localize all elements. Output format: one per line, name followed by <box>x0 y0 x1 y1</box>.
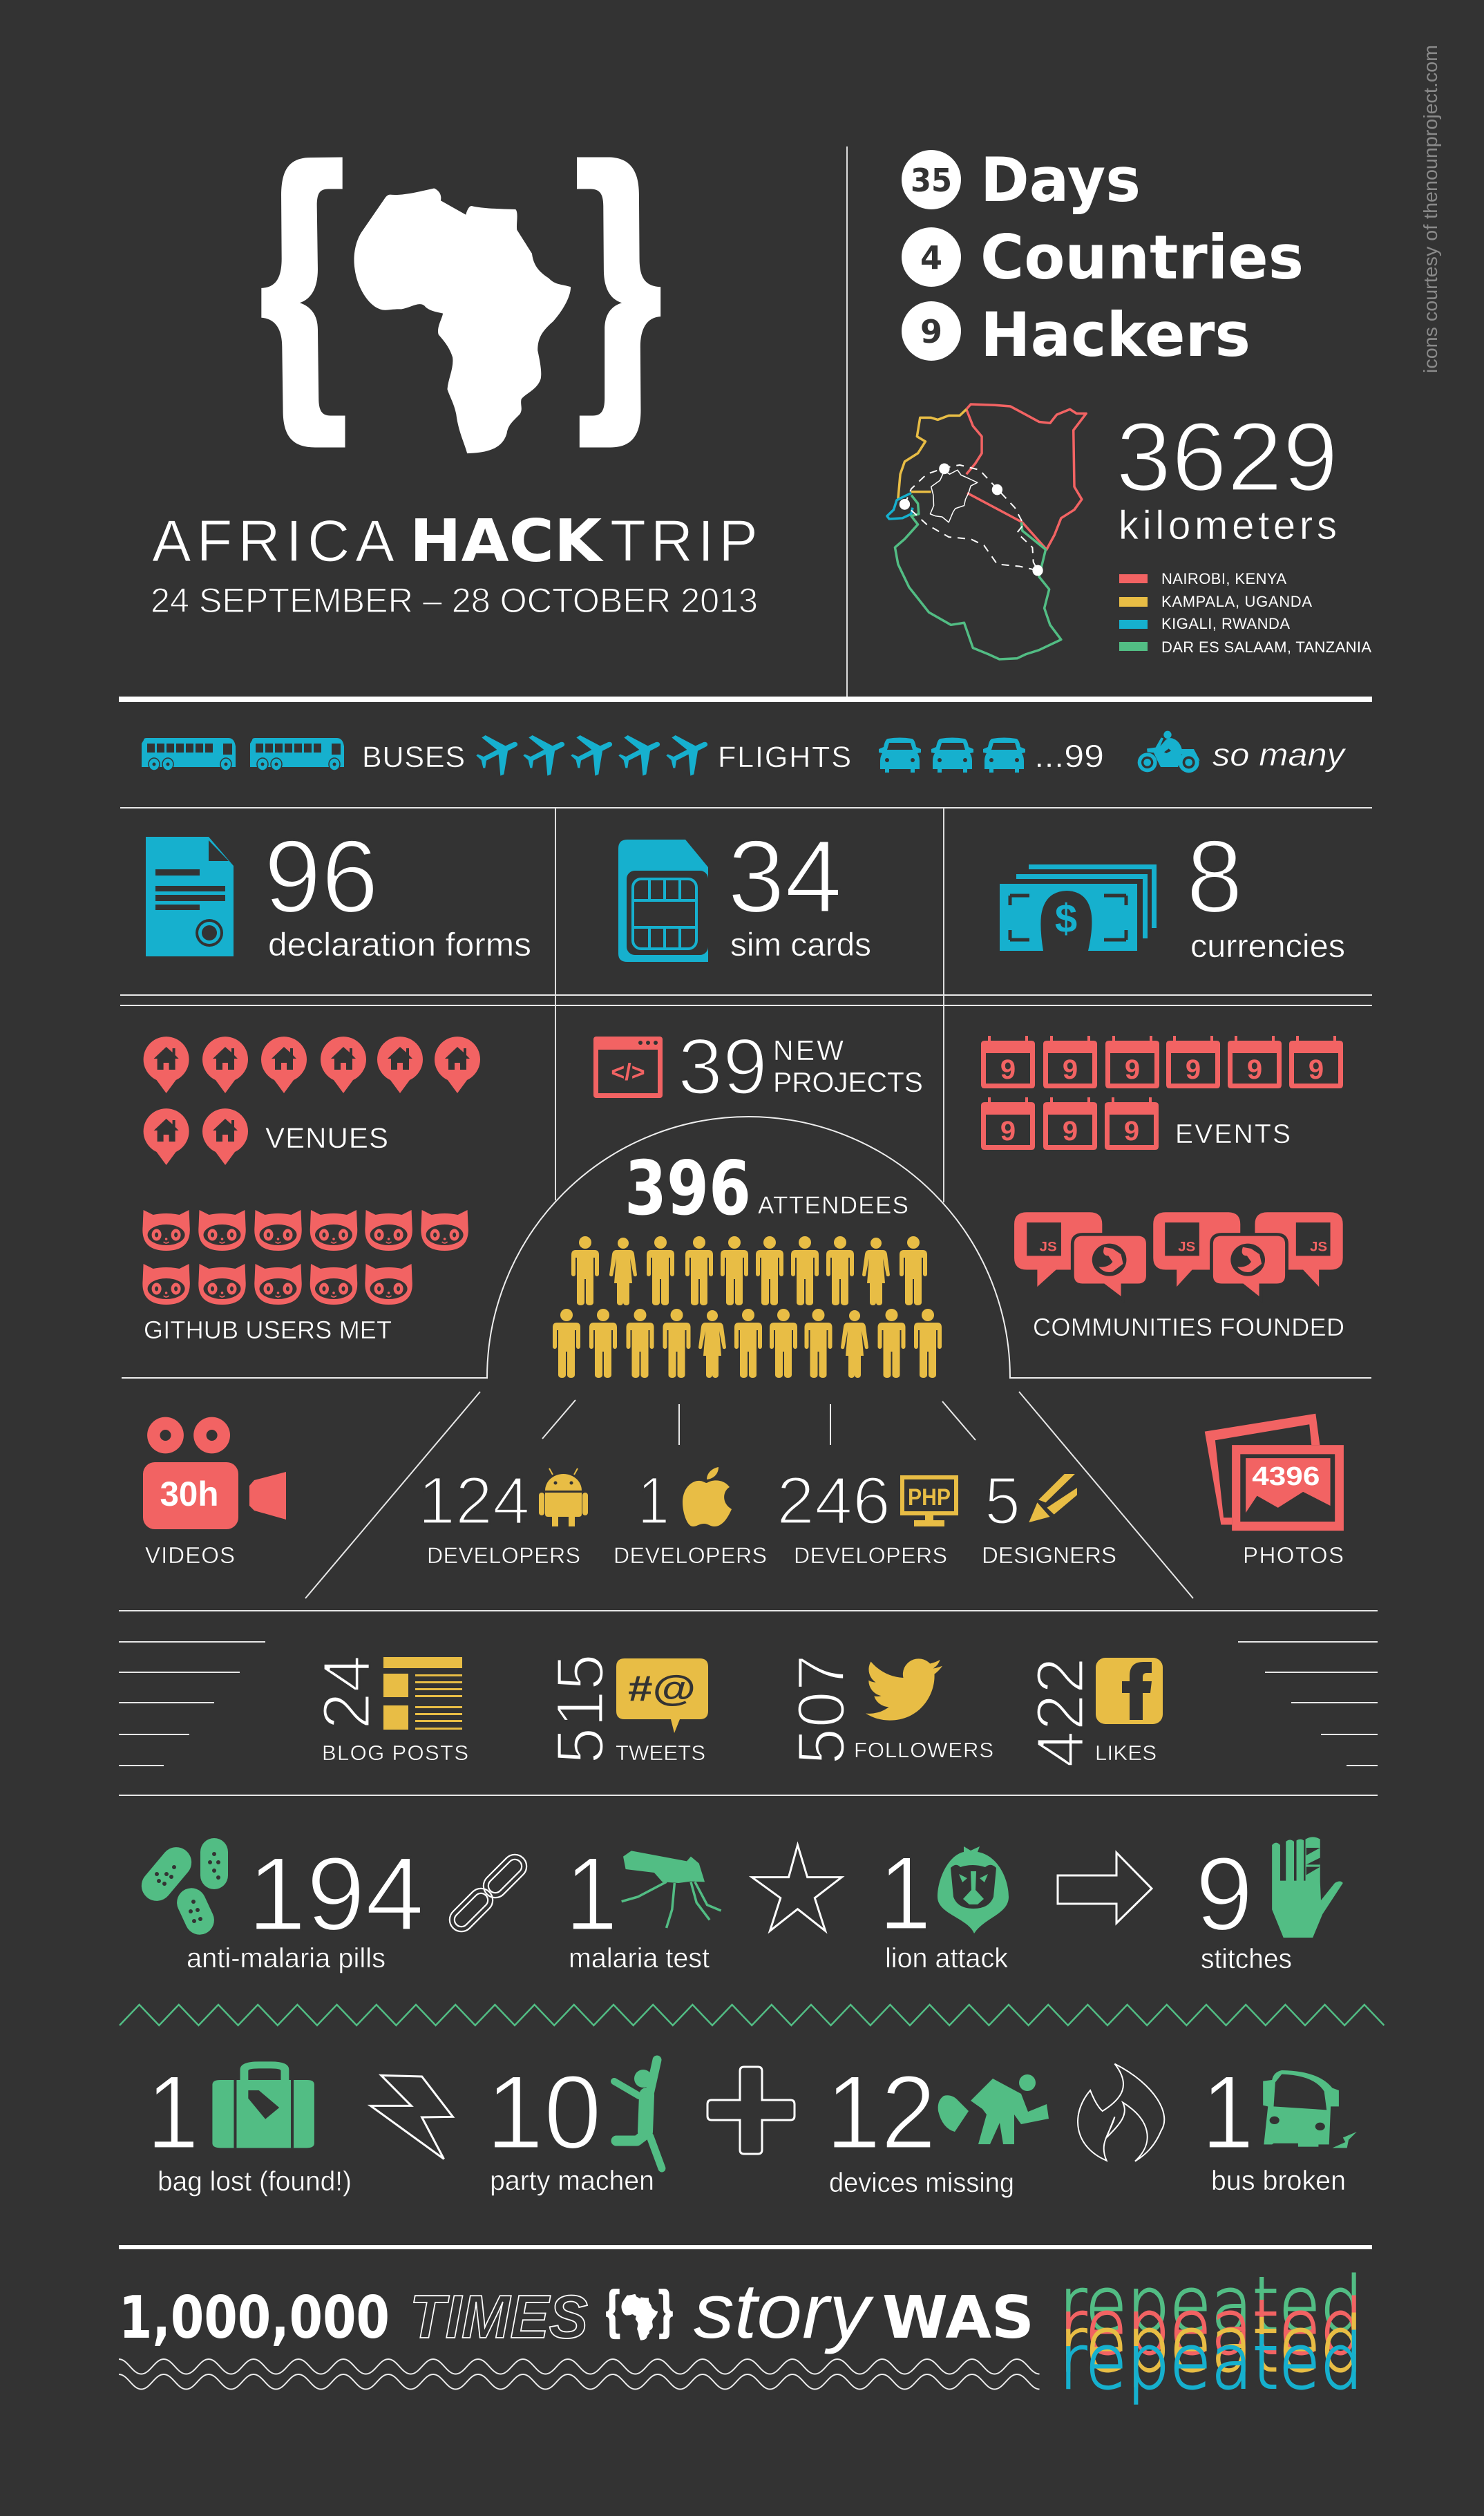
panel: trip totals <box>902 144 1304 370</box>
label: designers: DESIGNERS <box>982 1542 1116 1568</box>
label: malaria test: malaria test <box>569 1943 710 1974</box>
icon: video camera: 30h <box>160 1475 218 1513</box>
icon: php monitor: PHP <box>908 1484 951 1511</box>
label: devices missing: devices missing <box>829 2168 1014 2198</box>
label: videos: VIDEOS <box>145 1542 235 1568</box>
label: developers: DEVELOPERS <box>613 1543 767 1568</box>
icon: banknotes: $ <box>1055 896 1077 941</box>
label: bag lost: bag lost (found!) <box>158 2166 352 2197</box>
stat: 3629 kilometers: kilometers <box>1119 503 1337 548</box>
panel: blog posts <box>309 1655 468 1765</box>
label: currencies: currencies <box>1190 927 1345 964</box>
icon: suitcase <box>212 2061 314 2148</box>
stat: 9 hackers: 9 <box>920 313 942 350</box>
panel: sim cards <box>618 818 871 963</box>
label: github users met: GITHUB USERS MET <box>144 1316 392 1344</box>
icon: facebook <box>1096 1658 1163 1724</box>
icon: star outline <box>752 1845 841 1931</box>
panel: photos <box>1205 1414 1344 1568</box>
number: 422: 422 <box>1022 1657 1098 1768</box>
panel: party machen <box>486 2054 662 2196</box>
icon: photo frames <box>1205 1414 1344 1531</box>
map: East Africa route <box>887 404 1086 659</box>
text: repeated layered: repeated <box>1059 2300 1363 2389</box>
icon: running man with bag <box>938 2074 1049 2144</box>
label: venues: VENUES <box>265 1122 388 1154</box>
panel: designers <box>982 1463 1116 1568</box>
icon: video camera <box>143 1417 286 1529</box>
icon: lightning outline <box>370 2075 453 2159</box>
title: AFRICA HACK TRIP <box>152 507 758 576</box>
text: story: story <box>694 2268 874 2354</box>
number: 10: 10 <box>486 2054 602 2171</box>
panel: anti-malaria pills <box>135 1835 424 1974</box>
icon: dancer <box>614 2060 662 2168</box>
panel: communities founded <box>1014 1212 1344 1341</box>
number: 1: 1 <box>1201 2054 1254 2171</box>
icon: blog layout <box>383 1657 462 1730</box>
number: 8: 8 <box>1186 818 1243 934</box>
date line: 24 SEPTEMBER – 28 OCTOBER 2013 <box>151 581 758 620</box>
text: TIMES outline: TIMES <box>410 2282 588 2351</box>
number: 1: 1 <box>638 1463 669 1538</box>
number: 39: 39 <box>678 1023 768 1111</box>
icon: plus outline <box>707 2067 795 2154</box>
panel: venues <box>144 1037 480 1165</box>
panel: devices missing <box>826 2054 1049 2198</box>
number: 1: 1 <box>565 1835 618 1953</box>
decoration: waves <box>119 2359 1039 2390</box>
stat: 35 days <box>902 144 1141 216</box>
label: tweets: TWEETS <box>616 1741 705 1765</box>
legend: cities <box>1119 570 1371 656</box>
label: 99 cars: ...99 <box>1034 738 1104 774</box>
panel: android developers <box>418 1463 588 1568</box>
label: buses: BUSES <box>362 741 465 774</box>
icon: banknotes <box>1000 864 1157 951</box>
panel: attendees <box>553 1146 942 1378</box>
icon: buses <box>142 738 344 770</box>
number: 1: 1 <box>146 2054 199 2171</box>
icon: small logo <box>606 2289 673 2340</box>
legend: cities: NAIROBI, KENYA <box>1161 570 1286 587</box>
panel: tweets <box>542 1654 708 1765</box>
panel: bus broken <box>1201 2054 1357 2196</box>
panel: videos <box>143 1417 286 1568</box>
icon: people row one <box>571 1236 927 1305</box>
icon: code window: </> <box>611 1059 645 1086</box>
icon: pencil <box>1029 1474 1077 1522</box>
text: WAS: WAS <box>882 2284 1034 2352</box>
icon: broken bus <box>1263 2070 1357 2148</box>
icon: arrow outline <box>1058 1853 1152 1923</box>
icon: code window <box>593 1037 663 1098</box>
label: declaration forms: declaration forms <box>268 926 531 963</box>
number: 1: 1 <box>879 1835 931 1952</box>
label: lion attack: lion attack <box>885 1943 1009 1974</box>
label: events: EVENTS <box>1175 1119 1291 1149</box>
icon: flame outline <box>1078 2064 1164 2162</box>
label: communities founded: COMMUNITIES FOUNDED <box>1033 1313 1344 1341</box>
icon: php monitor <box>902 1477 956 1526</box>
label: blog posts: BLOG POSTS <box>322 1741 468 1765</box>
icon: photo frames: 4396 <box>1252 1462 1320 1491</box>
label: flights: FLIGHTS <box>718 741 851 774</box>
panel: new projects <box>593 1023 923 1111</box>
icon: hash-at bubble: #@ <box>628 1669 696 1709</box>
icon: hash-at bubble <box>616 1658 708 1733</box>
icon: calendars <box>981 1036 1343 1150</box>
arc: attendees dome <box>122 1117 1371 1378</box>
panel: closing sentence <box>119 2260 1363 2406</box>
title: AFRICA HACK TRIP: TRIP <box>610 509 758 574</box>
icon: mosquito <box>622 1851 721 1928</box>
label: so many: so many <box>1212 737 1347 773</box>
panel: malaria test <box>565 1835 721 1974</box>
text: repeated layered: repeated <box>1059 2318 1363 2406</box>
number: 507: 507 <box>783 1654 859 1765</box>
icon: speech bubbles <box>1014 1212 1343 1296</box>
icon: calendars: 9 <box>1125 1054 1140 1085</box>
number: 5: 5 <box>984 1463 1020 1538</box>
label: stitches: stitches <box>1201 1944 1292 1974</box>
icon: document <box>146 837 234 956</box>
icon: calendars: 9 <box>1063 1054 1078 1085</box>
panel: likes <box>1022 1657 1163 1768</box>
label: attendees: ATTENDEES <box>758 1192 909 1219</box>
icon: motorbike <box>1138 731 1200 773</box>
icon: calendars: 9 <box>1309 1054 1324 1085</box>
number: 24: 24 <box>309 1655 384 1730</box>
icon: octocats <box>142 1210 468 1305</box>
label: photos: PHOTOS <box>1243 1542 1344 1568</box>
icon: cars <box>879 738 1025 773</box>
stat: 9 hackers: Hackers <box>980 299 1250 370</box>
text: 1,000,000: 1,000,000 <box>119 2284 390 2352</box>
stat: 3629 kilometers: 3629 <box>1116 402 1338 512</box>
icon: calendars: 9 <box>1247 1054 1262 1085</box>
label: bus broken: bus broken <box>1211 2166 1346 2196</box>
icon: stitched hand <box>1272 1837 1343 1938</box>
icon: people row two <box>553 1309 942 1378</box>
icon: speech bubbles: JS <box>1178 1240 1195 1254</box>
number: 34: 34 <box>727 818 842 934</box>
icon: calendars: 9 <box>1186 1054 1201 1085</box>
panel: declaration forms <box>146 818 531 963</box>
icon: calendars: 9 <box>1000 1054 1016 1085</box>
panel: github users <box>142 1210 468 1344</box>
panel: bag lost <box>146 2054 352 2197</box>
label: sim cards: sim cards <box>730 926 871 963</box>
panel: stitches <box>1195 1835 1343 1974</box>
legend: cities: KAMPALA, UGANDA <box>1161 593 1312 610</box>
label: anti-malaria pills: anti-malaria pills <box>187 1943 386 1974</box>
icon: flights <box>476 735 707 776</box>
title: AFRICA HACK TRIP: AFRICA <box>152 509 394 574</box>
number: 9: 9 <box>1195 1835 1253 1953</box>
number: 246: 246 <box>777 1463 891 1538</box>
label: likes: LIKES <box>1095 1741 1157 1765</box>
panel: php developers <box>777 1463 956 1568</box>
icon: speech bubbles: JS <box>1310 1240 1327 1254</box>
text: repeated layered <box>1059 2260 1363 2406</box>
icon: twitter bird <box>866 1658 942 1721</box>
panel: currencies <box>1000 818 1345 964</box>
icon: apple <box>683 1467 732 1526</box>
label: new projects: NEW <box>773 1034 844 1066</box>
stat: 4 countries: 4 <box>920 239 942 276</box>
icon: calendars: 9 <box>1124 1116 1139 1146</box>
title: AFRICA HACK TRIP: HACK <box>410 507 604 576</box>
stat: 35 days: Days <box>980 144 1141 216</box>
icon: sim card <box>618 840 708 962</box>
icon: calendars: 9 <box>1063 1116 1078 1146</box>
legend: cities: DAR ES SALAAM, TANZANIA <box>1161 639 1371 656</box>
label: new projects <box>773 1034 923 1098</box>
number: 194: 194 <box>247 1835 424 1953</box>
icon: chain link <box>445 1850 531 1936</box>
label: followers: FOLLOWERS <box>854 1738 993 1762</box>
credit: icons courtesy: icons courtesy of thenounproject.com <box>1420 45 1441 373</box>
label: developers: DEVELOPERS <box>794 1543 947 1568</box>
number: 124: 124 <box>418 1463 530 1538</box>
stat: 35 days: 35 <box>911 162 952 199</box>
icon: location pins <box>144 1037 480 1165</box>
text: repeated layered: repeated <box>1059 2260 1363 2349</box>
icon: lion <box>938 1846 1009 1933</box>
number: 12: 12 <box>826 2054 936 2171</box>
stat: 4 countries: Countries <box>980 222 1304 293</box>
number: 396: 396 <box>625 1146 751 1232</box>
label: party machen: party machen <box>490 2166 654 2196</box>
number: 515: 515 <box>542 1654 618 1764</box>
icon: android <box>539 1468 588 1526</box>
number: 96: 96 <box>264 818 379 934</box>
panel: followers <box>783 1654 993 1765</box>
label: developers: DEVELOPERS <box>427 1543 580 1568</box>
legend: cities: KIGALI, RWANDA <box>1161 615 1290 632</box>
label: new projects: PROJECTS <box>773 1066 923 1098</box>
icon: curly-brace Africa logo <box>261 158 660 453</box>
icon: pills <box>135 1838 228 1940</box>
panel: transport row <box>142 731 1347 776</box>
panel: lion attack <box>879 1835 1009 1974</box>
text: repeated layered: repeated <box>1059 2283 1363 2372</box>
icon: calendars: 9 <box>1000 1116 1016 1146</box>
icon: speech bubbles: JS <box>1040 1240 1057 1254</box>
panel: apple developer <box>613 1463 767 1568</box>
panel: events <box>981 1036 1343 1150</box>
